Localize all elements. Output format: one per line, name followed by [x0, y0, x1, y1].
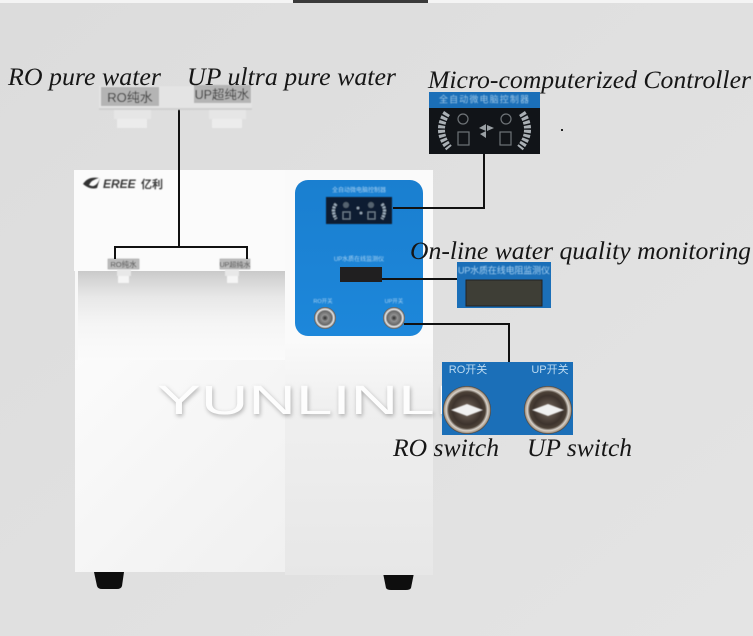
upper housing: [74, 170, 433, 271]
brand logo: [83, 177, 163, 191]
switch RO: [443, 386, 491, 434]
blue control panel: UP水质在线监测仪: [334, 255, 384, 263]
blue control panel: RO开关: [313, 297, 333, 305]
machine feet: [94, 572, 414, 590]
stray dot: [561, 129, 563, 131]
switch UP: [524, 386, 572, 434]
controller detail: 全自动微电脑控制器: [439, 93, 529, 104]
panel display: [326, 197, 392, 224]
connector: monitor: [382, 278, 457, 280]
panel switch UP: [383, 307, 405, 329]
connector: controller: [393, 153, 484, 208]
blue control panel: 全自动微电脑控制器: [332, 186, 386, 194]
small outlet label: UP: UP超纯水: [220, 260, 250, 269]
watermark: YUNLINLI: [157, 377, 453, 423]
label: RO pure water: RO pure water: [7, 64, 161, 91]
outlet detail panel: UP超纯水: [195, 87, 250, 102]
small outlet label: UP: [220, 259, 250, 283]
switch detail: UP开关: [531, 362, 569, 376]
label: UP ultra pure water: UP ultra pure water: [187, 64, 396, 91]
switch detail: RO开关: [449, 362, 487, 376]
monitor detail: [457, 262, 551, 308]
lower left panel: [75, 355, 286, 572]
blue control panel: [295, 180, 423, 336]
brand logo: EREE: [103, 177, 137, 191]
lower right panel: [285, 340, 433, 575]
label: UP switch: UP switch: [527, 435, 632, 462]
controller detail: [429, 92, 540, 154]
top strip: [0, 0, 753, 3]
panel meter: [340, 267, 382, 282]
monitor detail: UP水质在线电阻监测仪: [458, 264, 550, 275]
label: controller: Micro-computerized Controller: [427, 67, 751, 94]
water outlet recess: [78, 270, 285, 360]
label: monitoring: On-line water quality monitoring: [410, 238, 751, 265]
switch detail: [442, 362, 573, 435]
small outlet label: RO: RO纯水: [110, 259, 137, 269]
blue control panel: UP开关: [385, 297, 404, 305]
connector: switches: [404, 324, 509, 362]
outlet detail panel: RO纯水: [107, 90, 153, 105]
panel switch RO: [314, 307, 336, 329]
label: RO switch: RO switch: [392, 435, 499, 462]
small outlet label: RO: [108, 259, 139, 283]
brand logo: 亿利: [141, 177, 163, 191]
connector: outlets: [115, 109, 247, 259]
outlet detail panel: [99, 85, 252, 128]
water purifier machine: [74, 170, 433, 590]
